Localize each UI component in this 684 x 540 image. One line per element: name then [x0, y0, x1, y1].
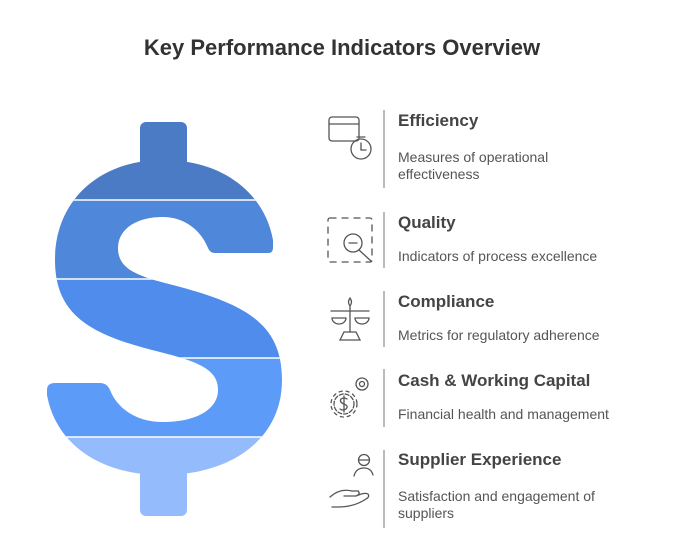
row: cash: [383, 369, 609, 427]
text: Compliance: [398, 292, 494, 311]
text: Efficiency: [398, 111, 478, 130]
text: Cash & Working Capital: [398, 371, 590, 390]
row: efficiency: [383, 110, 548, 188]
icon: cash gears: [331, 378, 368, 417]
icon: efficiency: [329, 117, 371, 159]
icon: compliance: [331, 298, 369, 340]
text: Supplier Experience: [398, 450, 561, 469]
title: Key Performance Indicators Overview: [144, 35, 540, 60]
text: effectiveness: [398, 166, 479, 182]
text: Financial health and management: [398, 406, 609, 422]
text: Quality: [398, 213, 456, 232]
text: suppliers: [398, 505, 454, 521]
text: Measures of operational: [398, 149, 548, 165]
text: Satisfaction and engagement of: [398, 488, 595, 504]
icon: quality: [328, 218, 372, 262]
icon: supplier experience: [330, 454, 373, 507]
text: Indicators of process excellence: [398, 248, 597, 264]
row: quality: [383, 212, 597, 268]
row: compliance: [383, 291, 600, 347]
text: Metrics for regulatory adherence: [398, 327, 600, 343]
row: supplier: [383, 450, 595, 528]
dollar sign graphic: [47, 116, 374, 516]
